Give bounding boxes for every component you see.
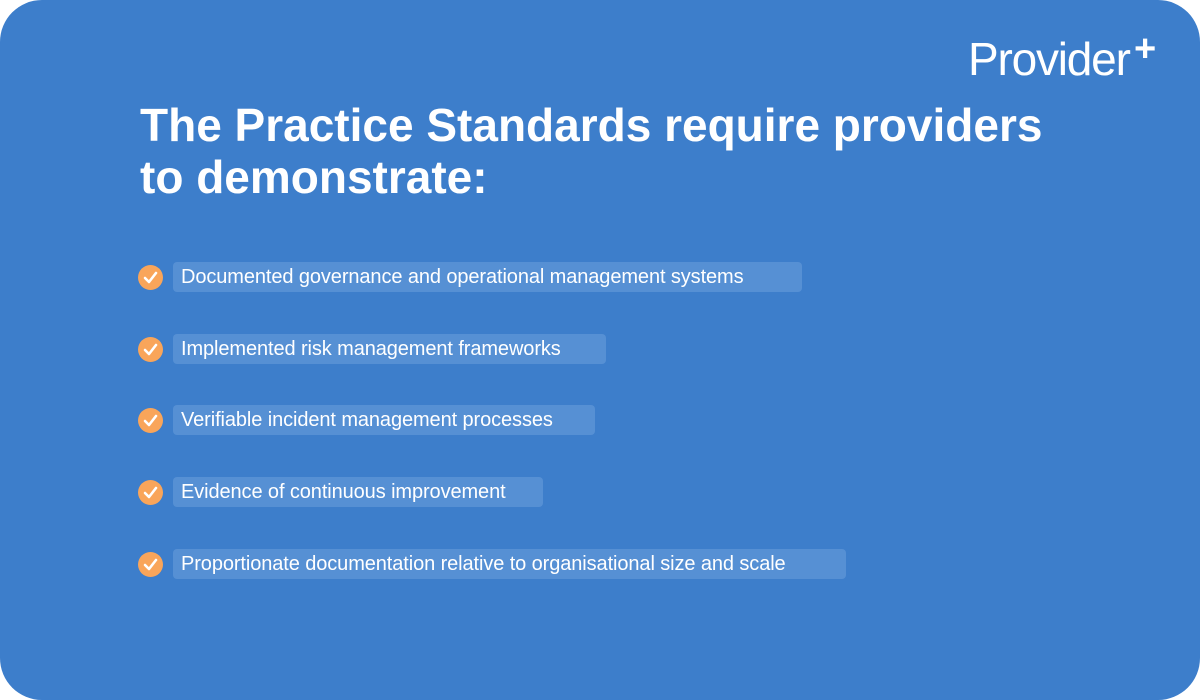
item 2: Implemented risk management frameworks bbox=[181, 338, 561, 360]
item 5 bbox=[138, 549, 846, 579]
item 4 bbox=[138, 477, 543, 507]
item 2 bbox=[138, 334, 606, 364]
item 1: Documented governance and operational management systems bbox=[181, 266, 744, 288]
title: The Practice Standards require providers to demonstrate: bbox=[140, 99, 1042, 203]
item 5: Proportionate documentation relative to organisational size and scale bbox=[181, 553, 786, 575]
item 3: Verifiable incident management processes bbox=[181, 409, 553, 431]
item 4: Evidence of continuous improvement bbox=[181, 481, 506, 503]
logo: Provider bbox=[968, 33, 1130, 85]
item 1 bbox=[138, 262, 802, 292]
logo plus: + bbox=[1134, 28, 1156, 70]
item 3 bbox=[138, 405, 595, 435]
